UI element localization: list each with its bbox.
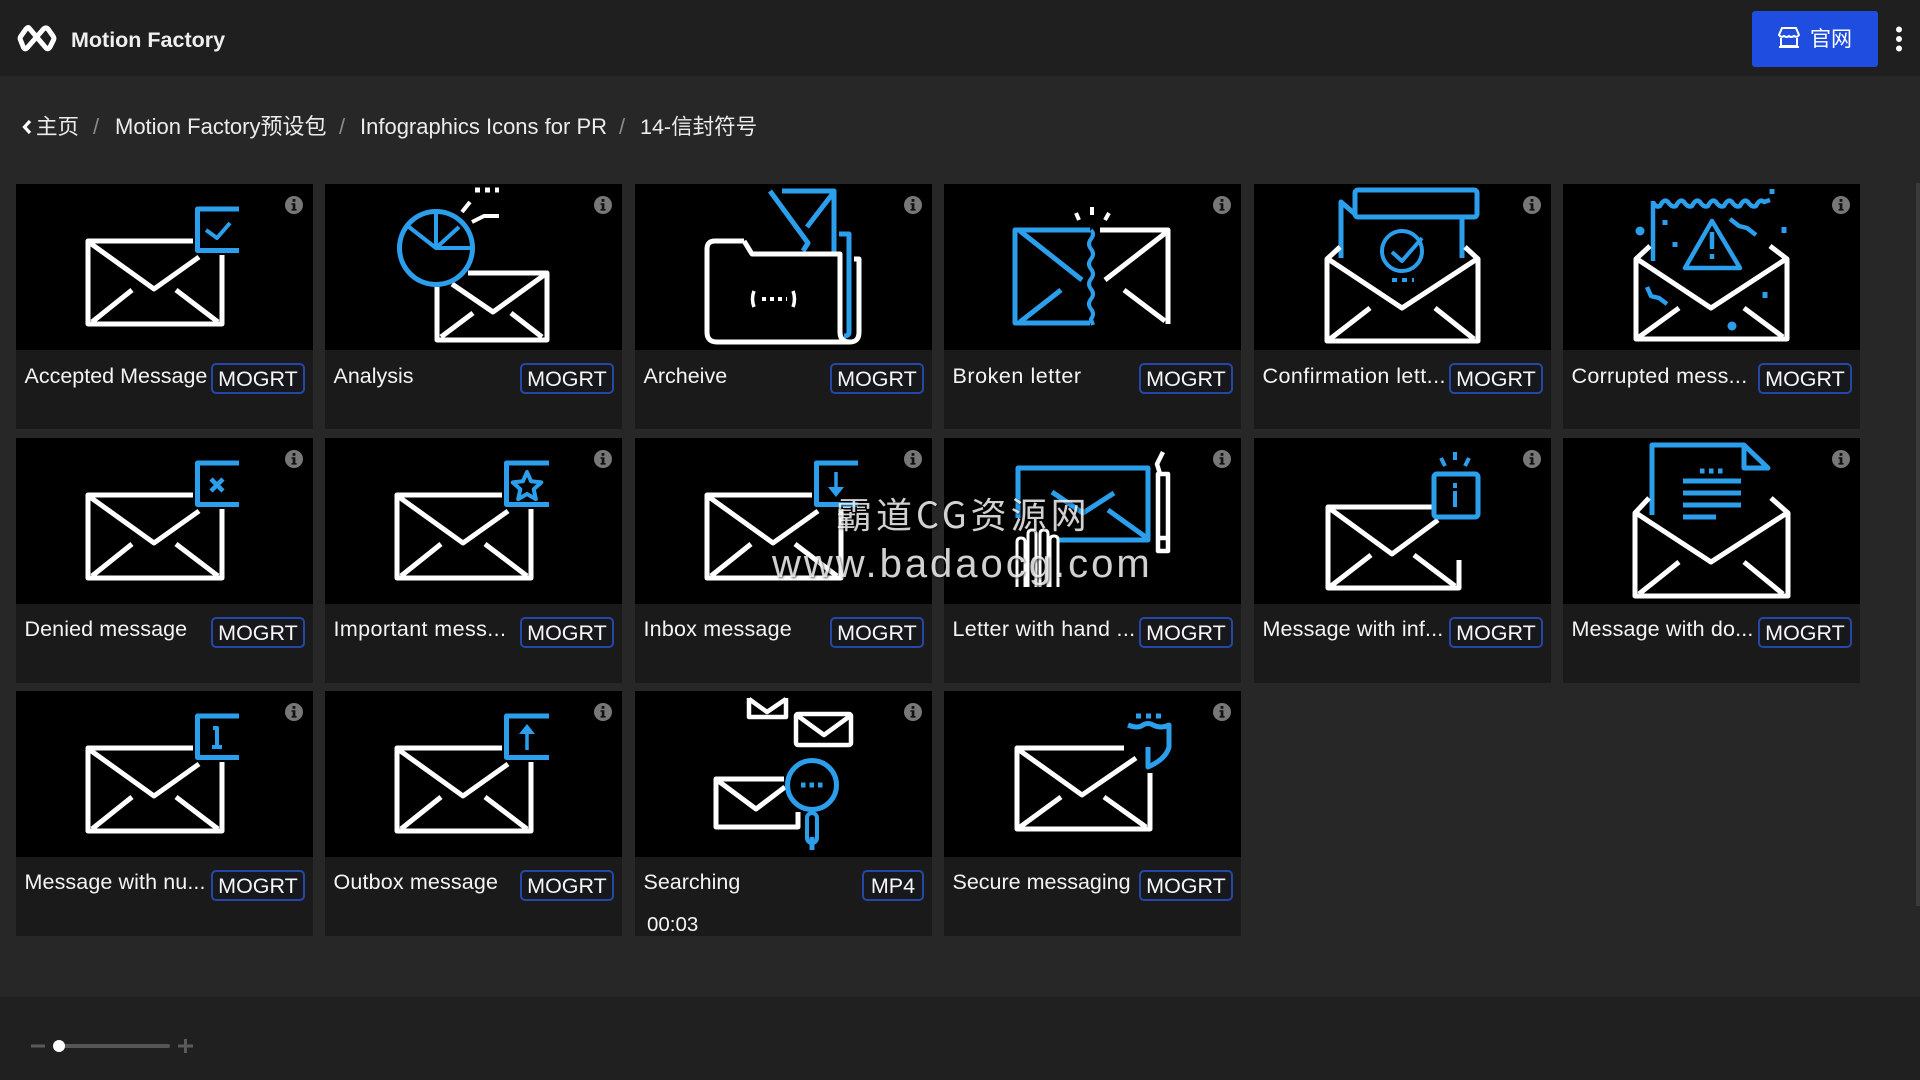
icon: letter with hand and pen bbox=[944, 438, 1242, 604]
name: Important mess... bbox=[334, 617, 506, 641]
format badge: MOGRT bbox=[1146, 621, 1226, 645]
card: Message with info bbox=[1254, 438, 1551, 683]
format badge: MOGRT bbox=[218, 874, 298, 898]
name: Analysis bbox=[334, 364, 414, 388]
format badge: MOGRT bbox=[218, 367, 298, 391]
crumb separator last: / bbox=[619, 114, 625, 139]
zoom slider bbox=[31, 1039, 193, 1053]
card: Outbox message bbox=[325, 691, 622, 936]
info icon bbox=[594, 703, 612, 721]
format badge: MOGRT bbox=[837, 367, 917, 391]
watermark line 2: www.badaocg.com bbox=[772, 542, 1153, 586]
icon: back chevron bbox=[22, 120, 32, 134]
name: Broken letter bbox=[952, 364, 1082, 388]
icon: menu dots bbox=[1896, 26, 1902, 52]
name: Secure messaging bbox=[952, 870, 1131, 894]
info icon bbox=[1213, 450, 1231, 468]
info icon bbox=[1832, 196, 1850, 214]
name: Archeive bbox=[644, 364, 727, 388]
info icon bbox=[904, 196, 922, 214]
info icon bbox=[904, 703, 922, 721]
info icon bbox=[285, 703, 303, 721]
watermark line 1: 霸道CG资源网 bbox=[836, 487, 1091, 539]
format badge bbox=[1139, 617, 1233, 648]
icon: envelope with cross bbox=[16, 438, 314, 604]
format badge: MOGRT bbox=[837, 621, 917, 645]
format badge bbox=[830, 363, 924, 394]
format badge: MOGRT bbox=[1456, 621, 1536, 645]
logo icon bbox=[18, 25, 56, 52]
crumb: current: 14-信封符号 bbox=[640, 115, 757, 139]
format badge: MOGRT bbox=[527, 367, 607, 391]
crumb separator first: / bbox=[93, 114, 99, 139]
icon: envelope with shield bbox=[944, 691, 1242, 857]
format badge bbox=[1139, 363, 1233, 394]
card: Analysis bbox=[325, 184, 622, 429]
name: Message with inf... bbox=[1262, 617, 1443, 641]
name: Corrupted mess... bbox=[1572, 364, 1747, 388]
card: Archeive bbox=[635, 184, 932, 429]
info icon bbox=[285, 196, 303, 214]
breadcrumb bbox=[22, 114, 757, 139]
format badge bbox=[211, 617, 305, 648]
button label: 官网 bbox=[1810, 28, 1852, 51]
format badge bbox=[1449, 617, 1543, 648]
name: Message with nu... bbox=[24, 870, 206, 894]
name: Searching bbox=[644, 870, 740, 894]
card: Message with number bbox=[16, 691, 313, 936]
card: Denied message bbox=[16, 438, 313, 683]
format badge bbox=[520, 363, 614, 394]
card: Confirmation letter bbox=[1254, 184, 1551, 429]
icon: open envelope with document bbox=[1563, 438, 1861, 604]
icon: folder with letter bbox=[635, 184, 933, 350]
format badge: MP4 bbox=[871, 874, 915, 898]
name: Message with do... bbox=[1572, 617, 1753, 641]
header bar bbox=[0, 0, 1920, 76]
info icon bbox=[594, 196, 612, 214]
name: Inbox message bbox=[644, 617, 792, 641]
format badge: MOGRT bbox=[1765, 367, 1845, 391]
name: Outbox message bbox=[334, 870, 498, 894]
icon: open envelope with check document bbox=[1254, 184, 1552, 350]
format badge bbox=[1449, 363, 1543, 394]
info icon bbox=[904, 450, 922, 468]
format badge bbox=[520, 870, 614, 901]
name: Confirmation lett... bbox=[1262, 364, 1446, 388]
info icon bbox=[285, 450, 303, 468]
card: Broken letter bbox=[944, 184, 1241, 429]
info icon bbox=[1213, 196, 1231, 214]
icon: store bbox=[1778, 27, 1800, 48]
format badge bbox=[830, 617, 924, 648]
format badge: MOGRT bbox=[527, 621, 607, 645]
crumb: icon pack: Infographics Icons for PR bbox=[360, 114, 607, 139]
format badge: MOGRT bbox=[527, 874, 607, 898]
info icon bbox=[1213, 703, 1231, 721]
name: Letter with hand ... bbox=[952, 617, 1135, 641]
crumb: home: 主页 bbox=[36, 115, 79, 139]
format badge: MOGRT bbox=[1146, 367, 1226, 391]
crumb: preset pack: Motion Factory预设包 bbox=[115, 114, 326, 139]
icon: envelope with star bbox=[325, 438, 623, 604]
info icon bbox=[594, 450, 612, 468]
format badge bbox=[520, 617, 614, 648]
icon: envelope with up arrow bbox=[325, 691, 623, 857]
format badge bbox=[1139, 870, 1233, 901]
format badge bbox=[1758, 363, 1852, 394]
format badge bbox=[211, 363, 305, 394]
card: Secure messaging bbox=[944, 691, 1241, 936]
icon: open envelope with warning bbox=[1563, 184, 1861, 350]
footer bar bbox=[0, 997, 1920, 1080]
name: Denied message bbox=[24, 617, 187, 641]
card: Important message bbox=[325, 438, 622, 683]
official site button bbox=[1752, 11, 1878, 67]
info icon bbox=[1832, 450, 1850, 468]
card: Accepted Message bbox=[16, 184, 313, 429]
card: Message with document bbox=[1563, 438, 1860, 683]
format badge bbox=[862, 870, 924, 901]
name: Accepted Message bbox=[24, 364, 207, 388]
format badge: MOGRT bbox=[1456, 367, 1536, 391]
card: Inbox message bbox=[635, 438, 932, 683]
format badge bbox=[1758, 617, 1852, 648]
format badge: MOGRT bbox=[218, 621, 298, 645]
icon: envelope with down arrow bbox=[635, 438, 933, 604]
format badge: MOGRT bbox=[1146, 874, 1226, 898]
card: Letter with hand bbox=[944, 438, 1241, 683]
format badge bbox=[211, 870, 305, 901]
icon: envelope with info box bbox=[1254, 438, 1552, 604]
watermark bbox=[772, 487, 1153, 587]
card: Searching bbox=[635, 691, 932, 936]
brand name: Motion Factory bbox=[71, 28, 225, 52]
card: Corrupted message bbox=[1563, 184, 1860, 429]
icon: envelopes with magnifier bbox=[635, 691, 933, 857]
format badge: MOGRT bbox=[1765, 621, 1845, 645]
info icon bbox=[1523, 196, 1541, 214]
duration: 00:03 bbox=[647, 913, 698, 936]
info icon bbox=[1523, 450, 1541, 468]
icon: envelope with check bbox=[16, 184, 314, 350]
crumb separator second: / bbox=[339, 114, 345, 139]
scrollbar bbox=[1916, 183, 1920, 906]
icon: envelope with number bbox=[16, 691, 314, 857]
icon: envelope with pie chart bbox=[325, 184, 623, 350]
icon: torn envelope bbox=[944, 184, 1242, 350]
